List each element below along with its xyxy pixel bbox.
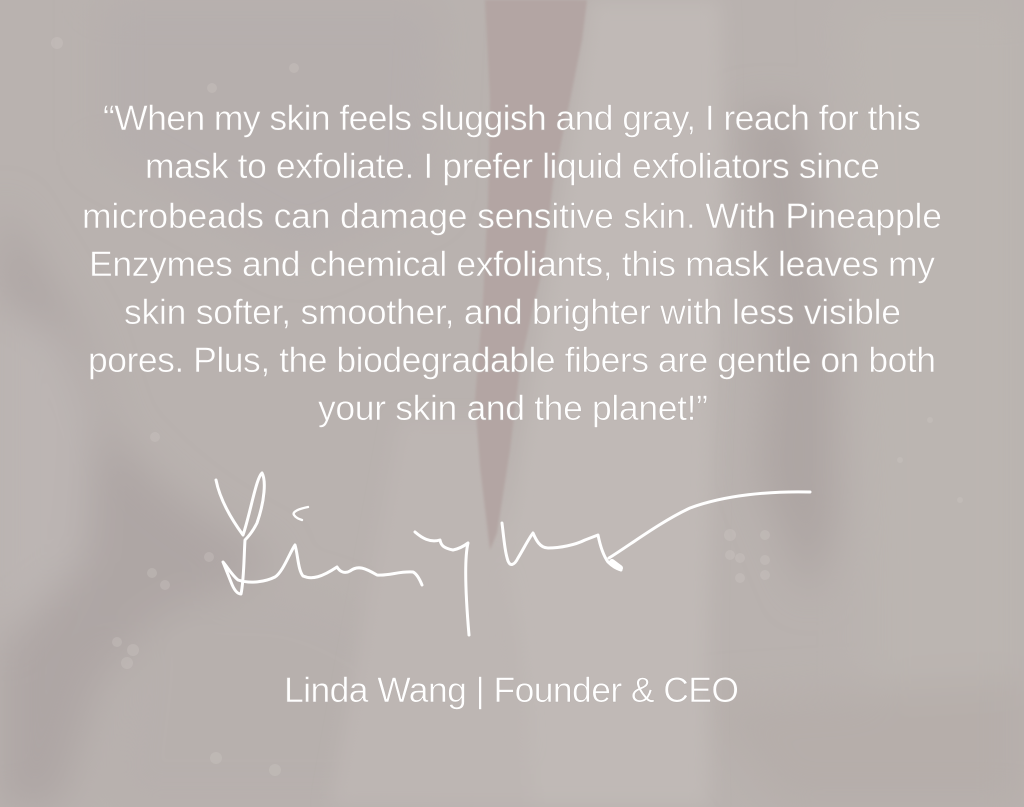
attribution: Linda Wang | Founder & CEO: [284, 670, 739, 710]
quote text: microbeads can damage sensitive skin. With Pineapple: [82, 196, 942, 236]
signature: [216, 473, 810, 635]
quote text: pores. Plus, the biodegradable fibers are gentle on both: [88, 340, 936, 380]
background: pink stripe: [475, 0, 587, 550]
quote text: mask to exfoliate. I prefer liquid exfoliators since: [145, 146, 880, 186]
quote text: skin softer, smoother, and brighter with less visible: [124, 292, 901, 332]
quote text: Enzymes and chemical exfoliants, this mask leaves my: [89, 244, 935, 284]
quote text: “When my skin feels sluggish and gray, I reach for this: [103, 98, 921, 138]
background: bokeh droplets: [112, 552, 214, 666]
quote text: your skin and the planet!”: [318, 388, 708, 428]
quote text: [82, 98, 942, 428]
